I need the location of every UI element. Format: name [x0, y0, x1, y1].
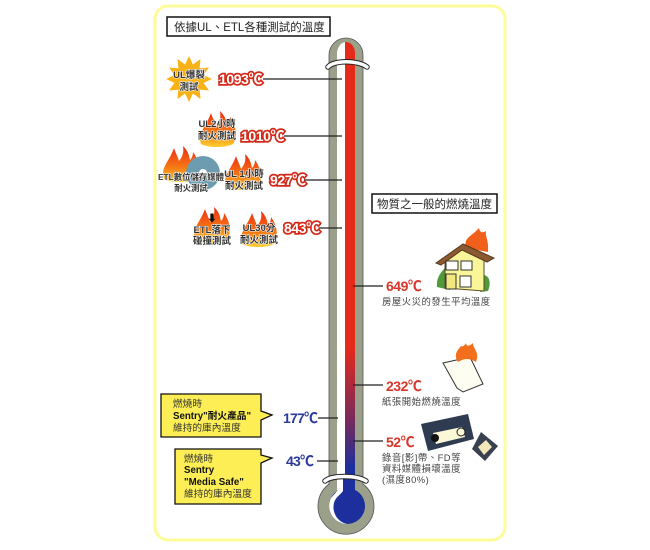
icon: UL 30 minute fire test — [240, 211, 278, 247]
temperature: 843: 843℃ — [284, 220, 320, 236]
temperature: 177: 177℃ — [283, 410, 318, 426]
label: 52 media: 資料媒體損壞溫度 — [382, 463, 461, 474]
icon: ETL drop impact test: ⬇ — [207, 213, 217, 225]
label: 52 media: (濕度80%) — [382, 474, 429, 485]
temperature: 927: 927℃ — [270, 172, 306, 188]
icon: UL 1 hour fire test: UL 1小時 — [224, 168, 264, 180]
label: 232 paper: 紙張開始燃燒溫度 — [382, 396, 461, 407]
label: 232 paper — [382, 378, 461, 407]
label: 649 house fire: 房屋火災的發生平均溫度 — [382, 296, 491, 307]
heading: general burning temperatures: 物質之一般的燃燒溫度 — [377, 197, 492, 211]
label: 52 media: 錄音[影]帶、FD等 — [382, 452, 461, 463]
icon: ETL drop impact test: ETL落下 — [194, 224, 231, 236]
icon: ETL drop impact test: 碰撞測試 — [193, 235, 231, 247]
callout: Sentry fire products: Sentry"耐火產品" — [173, 409, 251, 422]
icon: ETL digital media test: ETL數位儲存媒體 — [158, 172, 225, 182]
label: 52 media — [382, 434, 461, 485]
leader lines — [263, 79, 383, 461]
icon: ETL digital media test: 耐火測試 — [174, 183, 208, 193]
icon: video tape — [421, 414, 474, 451]
background frame — [155, 6, 505, 540]
callout: Sentry fire products: 燃燒時 — [173, 397, 202, 410]
heading: UL ETL tests: 依據UL、ETL各種測試的溫度 — [174, 20, 325, 34]
icon: UL explosion star — [166, 56, 212, 102]
temperature: 1010: 1010℃ — [241, 128, 285, 144]
icon: UL 1 hour fire test — [224, 154, 264, 192]
icon: UL 2 hour fire test: UL2小時 — [199, 118, 236, 130]
label: 649 house fire — [382, 278, 491, 307]
label: 232 paper: 232℃ — [386, 378, 422, 394]
label: 52 media: 52℃ — [386, 434, 415, 450]
lower ring — [325, 476, 366, 481]
icon: burning paper — [443, 343, 483, 392]
icon: UL 30 minute fire test: UL30分 — [243, 223, 276, 234]
icon: floppy disk — [472, 432, 498, 461]
icon: burning house — [436, 228, 494, 292]
icon: ETL drop impact test — [193, 207, 231, 247]
callout: Sentry Media-Safe: 維持的庫內溫度 — [184, 487, 252, 500]
icon: ETL digital media test — [158, 146, 225, 193]
temperature: 1093: 1093℃ — [219, 71, 263, 87]
callout: Sentry Media-Safe: Sentry — [184, 465, 215, 476]
icon: UL explosion star: UL爆裂 — [173, 69, 205, 81]
label: 649 house fire: 649℃ — [386, 278, 422, 294]
callout: Sentry Media-Safe — [175, 449, 272, 504]
icon: UL explosion star: 測試 — [179, 81, 199, 93]
icon: UL 2 hour fire test: 耐火測試 — [198, 130, 236, 142]
heading: general burning temperatures — [372, 194, 497, 213]
temperature: 43: 43℃ — [286, 453, 314, 469]
icon: UL 1 hour fire test: 耐火測試 — [225, 180, 263, 192]
callout: Sentry fire products — [161, 394, 272, 437]
callout: Sentry Media-Safe: "Media Safe" — [184, 477, 244, 488]
callout: Sentry fire products: 維持的庫內溫度 — [173, 421, 241, 434]
thermometer — [318, 38, 374, 534]
heading: UL ETL tests — [167, 17, 330, 36]
callout: Sentry Media-Safe: 燃燒時 — [184, 452, 213, 465]
icon: UL 30 minute fire test: 耐火測試 — [240, 234, 278, 246]
upper ring — [328, 62, 367, 67]
icon: UL 2 hour fire test — [198, 111, 236, 147]
